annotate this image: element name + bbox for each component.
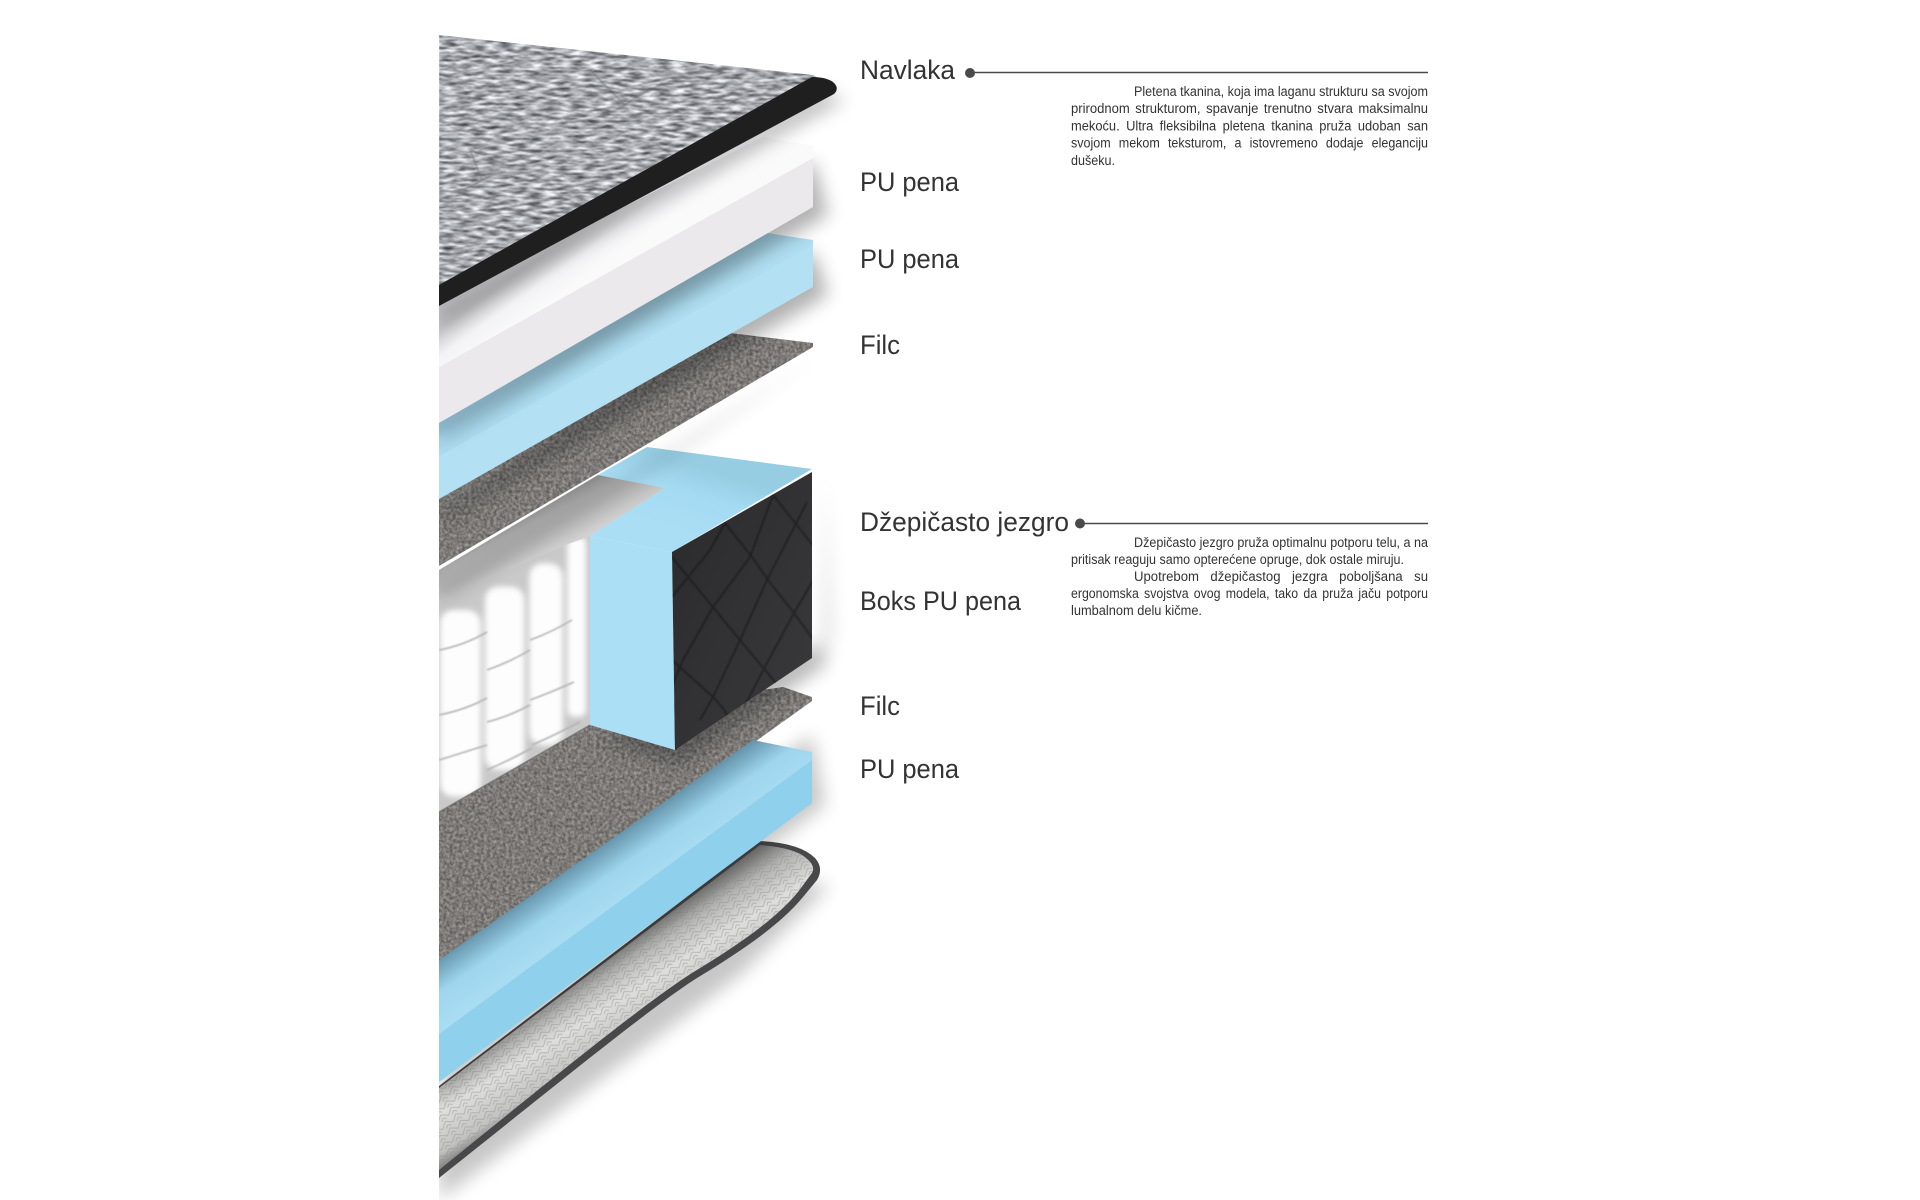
layer: felt upper [439,333,825,600]
text block: Džepičasto jezgro description: ergonomska svojstva ovog modela, tako da pruža jaču potporu [1071,586,1428,601]
text block: Navlaka description: svojom mekom teksturom, a istovremeno dodaje eleganciju [1071,136,1428,150]
label: PU pena 3: PU pena [860,754,960,784]
text block: Džepičasto jezgro description: lumbalnom delu kičme. [1071,603,1202,618]
text block: Navlaka description [1071,84,1428,168]
text block: Džepičasto jezgro description: Džepičasto jezgro pruža optimalnu potporu telu, a na [1134,535,1428,550]
label: Filc 1: Filc [860,330,900,360]
text block: Navlaka description: prirodnom strukturom, spavanje trenutno stvara maksimalnu [1071,101,1428,116]
layer: blue foam lower [439,735,825,1095]
spring pockets [439,537,586,797]
box foam top [590,447,812,552]
layer: PU foam white [439,137,828,440]
box foam front [590,536,675,750]
layer: bottom cover [439,841,830,1200]
label: PU pena 2: PU pena [860,244,960,274]
box foam frame [590,447,830,765]
mattress layers illustration [439,35,845,1200]
text block: Navlaka description: Pletena tkanina, koja ima laganu strukturu sa svojom [1134,84,1428,99]
text block: Džepičasto jezgro description [1071,535,1428,618]
label: Filc 2: Filc [860,691,900,721]
text block: Navlaka description: mekoću. Ultra fleksibilna pletena tkanina pruža udoban san [1071,118,1428,134]
pocket spring core [439,475,665,812]
callout leader: Navlaka [965,68,1428,78]
text block: Džepičasto jezgro description: pritisak reaguju samo opterećene opruge, dok ostale miruju. [1071,552,1404,567]
callout leader: Džepičasto jezgro [1075,518,1428,528]
top cover binding [439,77,837,306]
label: Boks PU pena: Boks PU pena [860,586,1022,616]
box quilted side [670,472,815,750]
label: Navlaka: Navlaka [860,55,956,85]
text block: Navlaka description: dušeku. [1071,153,1115,168]
layer: felt lower [439,687,812,968]
text block: Džepičasto jezgro description: Upotrebom džepičastog jezgra poboljšana su [1134,569,1428,584]
label: Džepičasto jezgro: Džepičasto jezgro [860,507,1069,537]
quilting creases [440,70,720,191]
layer: top cover [439,35,845,325]
layer: PU foam blue upper [439,230,828,525]
label: PU pena 1: PU pena [860,167,960,197]
